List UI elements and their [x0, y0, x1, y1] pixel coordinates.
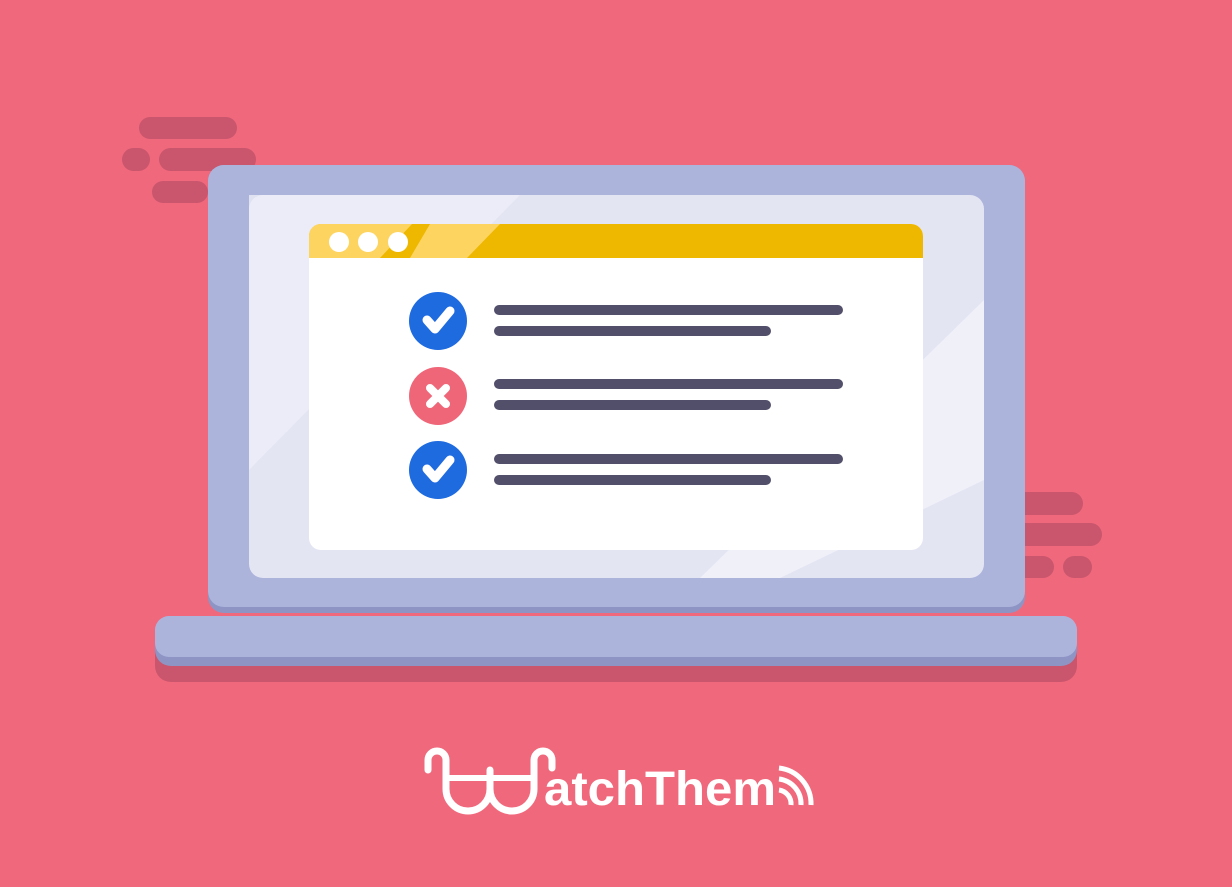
speed lines left	[122, 117, 256, 203]
laptop base	[155, 616, 1077, 682]
logo	[428, 751, 811, 816]
speed lines right	[1010, 492, 1102, 578]
row 2 cross	[409, 367, 843, 425]
browser window	[309, 224, 923, 550]
logo: atchThem	[544, 763, 776, 816]
row 3 check	[409, 441, 843, 499]
screen	[249, 195, 984, 578]
laptop lid	[208, 165, 1025, 613]
row 1 check	[409, 292, 843, 350]
window dots	[329, 232, 408, 252]
